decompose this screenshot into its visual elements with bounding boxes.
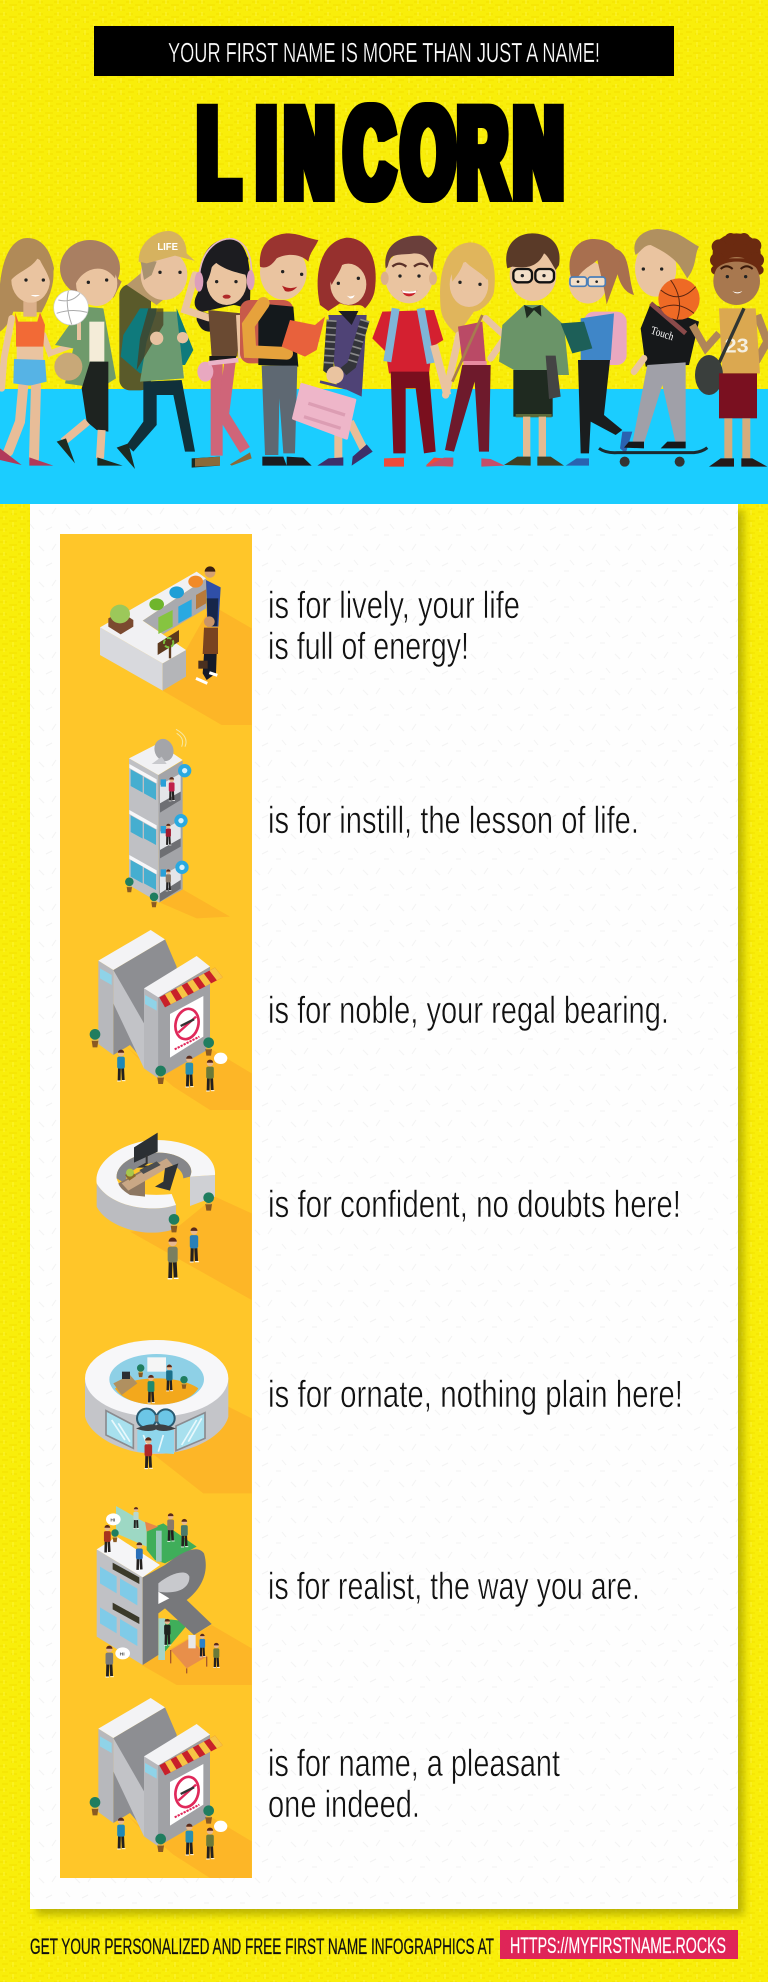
person: blonde girl (426, 242, 506, 467)
person: girl with pink bag (293, 238, 376, 466)
person: boy with book (240, 233, 325, 466)
panel shadow (36, 510, 744, 1915)
person: boy with tank top and shoulder bag (692, 233, 767, 467)
icon: O optician ring (85, 1340, 252, 1493)
icon: C reception desk (96, 1133, 252, 1300)
person: boy with glasses and green sweater (499, 233, 569, 466)
footer call to action: GET YOUR PERSONALIZED AND FREE FIRST NAME INFOGRAPHICS AT (30, 1934, 494, 1959)
person: boy with cap and backpack: LIFE (157, 242, 178, 253)
tagline banner (94, 26, 674, 76)
text: R line: is for realist, the way you are. (268, 1566, 640, 1608)
text: final N line: one indeed. (268, 1784, 420, 1826)
person: girl with orange top (0, 238, 77, 466)
illustration: group of twelve people (0, 229, 767, 469)
panel: white list card (30, 504, 738, 1909)
floor band behind people (0, 389, 768, 504)
icon: R office building (97, 1506, 252, 1685)
text: L line: is for lively, your life (268, 585, 520, 627)
icon: R office building: HI (120, 1651, 125, 1657)
person: boy on skateboard with basketball: Touch (649, 325, 675, 343)
person: girl with green jacket and volleyball (54, 240, 123, 466)
person: boy on skateboard with basketball (599, 229, 707, 467)
person: girl with pink headphones (185, 239, 255, 467)
title: LINCORN: LINCORN (198, 81, 563, 225)
icon: I tower (125, 729, 230, 918)
icon: R office building: HI (110, 1517, 116, 1523)
icon: N shop building (90, 930, 252, 1110)
person: girl with tablet and ponytail (561, 239, 634, 466)
left six people (0, 231, 376, 469)
panel: orange illustration column (60, 534, 252, 1878)
right six people (372, 229, 767, 467)
text: final N line: is for name, a pleasant (268, 1743, 560, 1785)
icon: N shop building repeated (90, 1698, 252, 1878)
text: L line: is full of energy! (268, 626, 469, 668)
icon: L recycling desk (100, 566, 252, 725)
person: boy with tank top and shoulder bag: 23 (725, 335, 749, 358)
person: boy with cap and backpack (117, 231, 220, 469)
list of name meanings (268, 585, 683, 1826)
person: boy with red shirt (372, 236, 453, 467)
text: I line: is for instill, the lesson of life. (268, 800, 639, 842)
